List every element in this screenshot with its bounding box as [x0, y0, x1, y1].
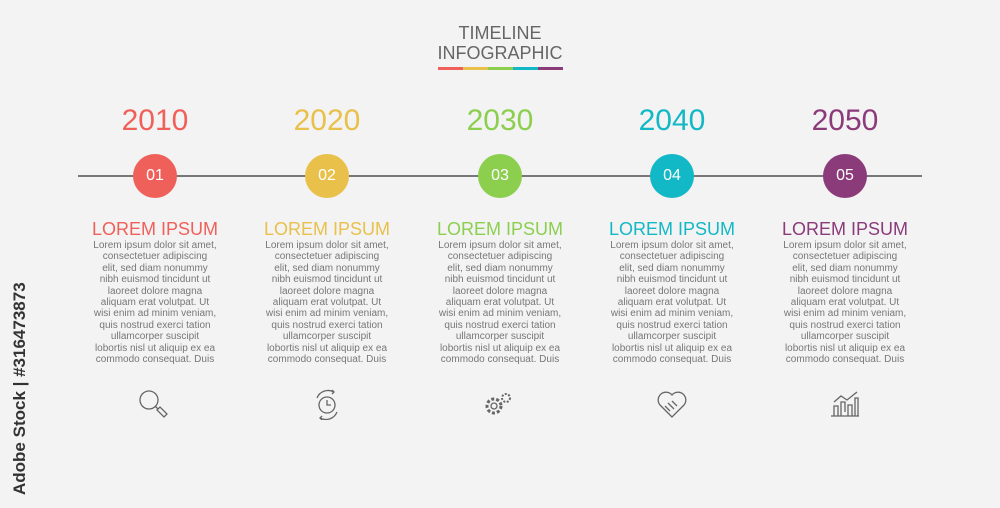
title underline: [438, 67, 562, 70]
step 3: wisi enim ad minim veniam,: [439, 308, 561, 319]
step 2: commodo consequat. Duis: [268, 354, 386, 365]
step 2: laoreet dolore magna: [280, 286, 374, 297]
step 4: laoreet dolore magna: [625, 286, 719, 297]
step 2: consectetuer adipiscing: [275, 251, 379, 262]
step 1: 01: [146, 167, 164, 184]
step 1: commodo consequat. Duis: [96, 354, 214, 365]
step 4: elit, sed diam nonummy: [619, 263, 725, 274]
step 3: Lorem ipsum dolor sit amet,: [438, 240, 562, 251]
icon: handshake heart: [658, 392, 686, 418]
step 5: quis nostrud exerci tation: [789, 320, 901, 331]
step 2: 2020: [294, 104, 360, 137]
step 5: commodo consequat. Duis: [786, 354, 904, 365]
step 5: aliquam erat volutpat. Ut: [791, 297, 899, 308]
step 5: [782, 104, 908, 417]
step 4: quis nostrud exerci tation: [616, 320, 728, 331]
step 1: elit, sed diam nonummy: [102, 263, 208, 274]
step 5: ullamcorper suscipit: [801, 331, 889, 342]
step 1: lobortis nisl ut aliquip ex ea: [95, 343, 215, 354]
step 5: 2050: [812, 104, 878, 137]
step 4: lobortis nisl ut aliquip ex ea: [612, 343, 732, 354]
step 1: laoreet dolore magna: [108, 286, 202, 297]
icon: magnifier: [139, 390, 168, 418]
step 3: aliquam erat volutpat. Ut: [446, 297, 554, 308]
step 3: 03: [491, 167, 509, 184]
step 5: wisi enim ad minim veniam,: [784, 308, 906, 319]
step 3: consectetuer adipiscing: [448, 251, 552, 262]
step 3: nibh euismod tincidunt ut: [445, 274, 555, 285]
step 4: wisi enim ad minim veniam,: [611, 308, 733, 319]
step 2: wisi enim ad minim veniam,: [266, 308, 388, 319]
step 1: Lorem ipsum dolor sit amet,: [93, 240, 217, 251]
step 4: nibh euismod tincidunt ut: [617, 274, 727, 285]
title: [437, 23, 563, 70]
step 1: aliquam erat volutpat. Ut: [101, 297, 209, 308]
step 3: 2030: [467, 104, 533, 137]
step 3: quis nostrud exerci tation: [444, 320, 556, 331]
icon: bar chart: [831, 392, 859, 417]
step 4: Lorem ipsum dolor sit amet,: [610, 240, 734, 251]
step 5: elit, sed diam nonummy: [792, 263, 898, 274]
step 3: [437, 104, 563, 414]
step 4: 04: [663, 167, 681, 184]
step 2: Lorem ipsum dolor sit amet,: [265, 240, 389, 251]
step 1: quis nostrud exerci tation: [99, 320, 211, 331]
step 5: laoreet dolore magna: [798, 286, 892, 297]
step 2: 02: [318, 167, 336, 184]
step 2: nibh euismod tincidunt ut: [272, 274, 382, 285]
step 4: commodo consequat. Duis: [613, 354, 731, 365]
step 3: commodo consequat. Duis: [441, 354, 559, 365]
step 2: quis nostrud exerci tation: [271, 320, 383, 331]
step 5: Lorem ipsum dolor sit amet,: [783, 240, 907, 251]
watermark id vertical: Adobe Stock | #316473873: [10, 282, 29, 495]
title: INFOGRAPHIC: [437, 43, 562, 63]
step 2: LOREM IPSUM: [264, 219, 390, 239]
step 1: ullamcorper suscipit: [111, 331, 199, 342]
step 1: consectetuer adipiscing: [103, 251, 207, 262]
step 5: nibh euismod tincidunt ut: [790, 274, 900, 285]
step 5: LOREM IPSUM: [782, 219, 908, 239]
step 5: lobortis nisl ut aliquip ex ea: [785, 343, 905, 354]
step 1: 2010: [122, 104, 188, 137]
timeline line: [78, 175, 922, 177]
step 1: LOREM IPSUM: [92, 219, 218, 239]
title: TIMELINE: [458, 23, 542, 43]
step 2: [264, 104, 390, 420]
icon: gears: [486, 393, 511, 414]
step 5: consectetuer adipiscing: [793, 251, 897, 262]
icon: clock cycle: [316, 390, 338, 420]
step 4: 2040: [639, 104, 705, 137]
step 4: aliquam erat volutpat. Ut: [618, 297, 726, 308]
step 2: ullamcorper suscipit: [283, 331, 371, 342]
step 5: 05: [836, 167, 854, 184]
step 3: laoreet dolore magna: [453, 286, 547, 297]
step 2: aliquam erat volutpat. Ut: [273, 297, 381, 308]
step 1: [92, 104, 218, 418]
step 1: nibh euismod tincidunt ut: [100, 274, 210, 285]
step 4: ullamcorper suscipit: [628, 331, 716, 342]
step 1: wisi enim ad minim veniam,: [94, 308, 216, 319]
step 4: [609, 104, 735, 418]
step 3: ullamcorper suscipit: [456, 331, 544, 342]
step 4: LOREM IPSUM: [609, 219, 735, 239]
step 2: lobortis nisl ut aliquip ex ea: [267, 343, 387, 354]
step 2: elit, sed diam nonummy: [274, 263, 380, 274]
step 4: consectetuer adipiscing: [620, 251, 724, 262]
step 3: LOREM IPSUM: [437, 219, 563, 239]
step 3: elit, sed diam nonummy: [447, 263, 553, 274]
step 3: lobortis nisl ut aliquip ex ea: [440, 343, 560, 354]
